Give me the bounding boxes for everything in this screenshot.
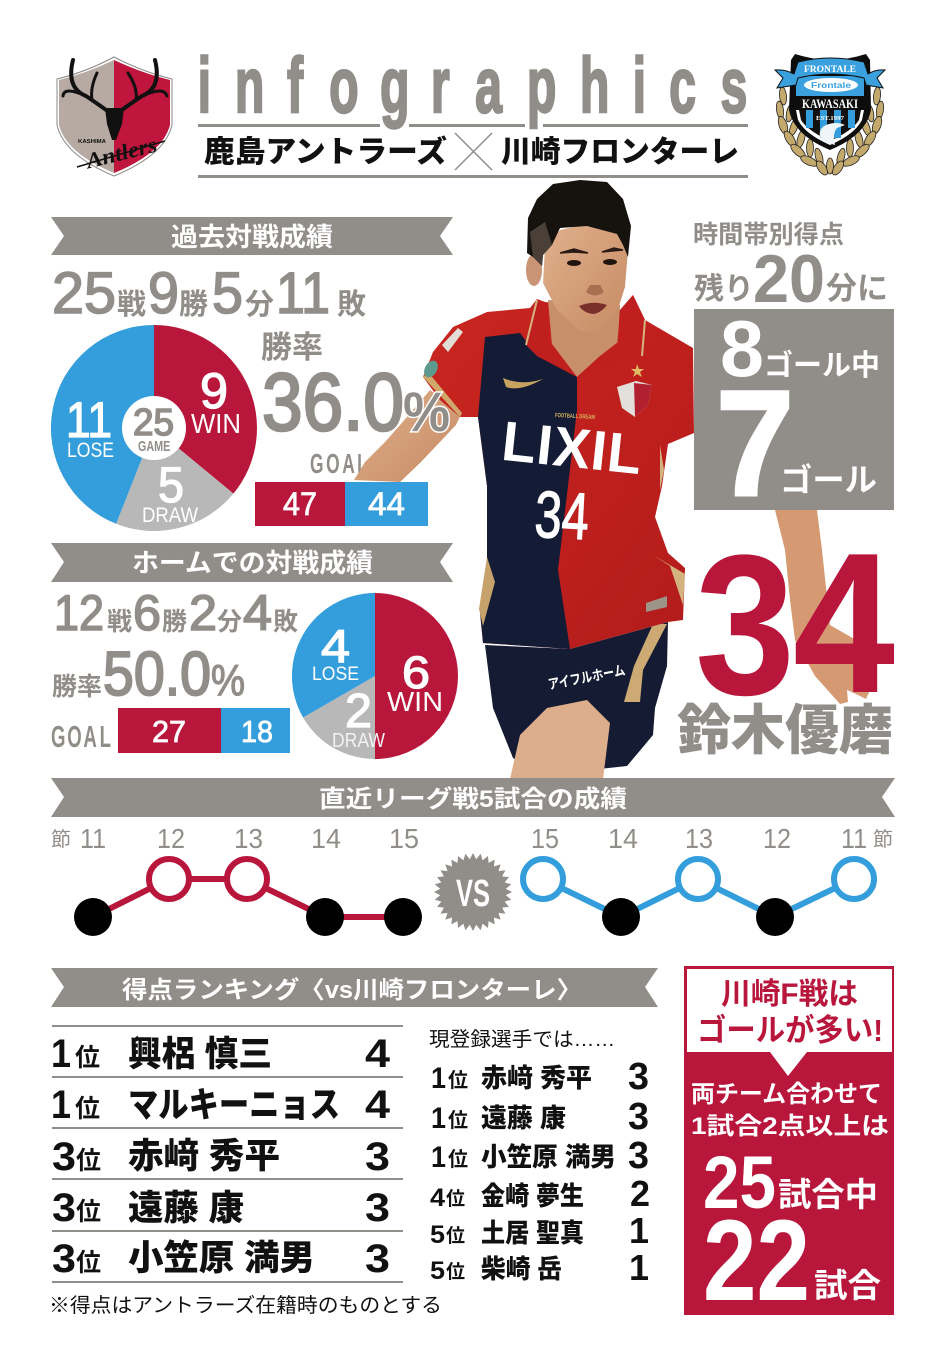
pie chart: overall record: 25: [133, 402, 174, 444]
pie chart: home record: [292, 593, 458, 759]
stat line: home record: 4: [243, 585, 272, 641]
table: all-time scorers: 遠藤 康: [128, 1189, 244, 1228]
stat line: home record: 2: [189, 585, 217, 641]
table: all-time scorers: 3: [52, 1186, 76, 1230]
callout panel: many goals against Kawasaki: 両チーム合わせて: [691, 1081, 882, 1108]
text: goal label: GOAL: [310, 448, 368, 479]
bar: goals at home: 18: [241, 714, 273, 749]
stat line: overall record: 11: [276, 261, 330, 326]
bar: goals overall: 44: [368, 486, 405, 522]
title: infographics: infographics: [198, 41, 747, 129]
table: current squad scorers: 金崎 夢生: [481, 1181, 584, 1211]
crest: Kashima Antlers: KASHIMA: [78, 139, 106, 145]
bar: goals overall: 47: [283, 486, 317, 522]
table: all-time scorers: 1: [51, 1083, 71, 1127]
stat line: overall record: 分: [245, 288, 274, 321]
callout panel: many goals against Kawasaki: 試合中: [778, 1176, 878, 1213]
panel: late goals: ゴール: [780, 462, 877, 498]
bar: goals at home: 27: [152, 714, 186, 749]
text: goals by time period: 分に: [826, 271, 888, 306]
text: goals by time period: 時間帯別得点: [693, 221, 844, 249]
crest: Kawasaki Frontale: FRONTALE: [804, 65, 856, 75]
table: current squad scorers: 3: [628, 1056, 649, 1098]
table: all-time scorers: 位: [76, 1147, 101, 1175]
table: all-time scorers: 3: [365, 1237, 390, 1281]
panel: late goals: 8: [720, 304, 764, 393]
bar: goals overall: [255, 482, 428, 526]
stat line: home record: 12: [54, 585, 104, 641]
round labels: Kawasaki: 節: [873, 828, 893, 851]
pie chart: home record: 6: [402, 647, 430, 698]
stat line: home record: 戦: [107, 608, 132, 636]
table: current squad scorers: 1: [431, 1102, 446, 1135]
stat line: overall record: 9: [148, 261, 179, 326]
stat line: overall record: 5: [212, 261, 243, 326]
panel: late goals: 7: [716, 359, 794, 527]
round labels: Kawasaki: 15: [531, 823, 559, 854]
table: current squad scorers: 1: [431, 1062, 446, 1095]
player photo illustration: 34: [533, 477, 591, 553]
heading: match-up: 鹿島アントラーズ: [204, 135, 447, 169]
stat: home win rate 50.0%: [52, 640, 245, 709]
crest: Kashima Antlers: Antlers: [81, 132, 159, 174]
stat line: overall record: 戦: [117, 288, 146, 321]
table: current squad scorers: 小笠原 満男: [481, 1142, 616, 1172]
table: all-time scorers: 位: [76, 1198, 101, 1226]
ribbon heading: past results: [51, 217, 453, 255]
callout panel: many goals against Kawasaki: 22: [703, 1197, 810, 1325]
table: all-time scorers: マルキーニョス: [128, 1086, 340, 1125]
table: all-time scorers: 1: [51, 1032, 71, 1076]
results chain: Kawasaki: [523, 859, 874, 936]
round labels: Kawasaki: 14: [608, 823, 638, 854]
player photo illustration: アイフルホーム: [547, 662, 626, 692]
player photo illustration: LIXIL: [499, 409, 645, 486]
crest: Kawasaki Frontale: EST.1997: [816, 115, 845, 122]
round labels: Kashima: 12: [157, 823, 185, 854]
table: all-time scorers: 位: [75, 1044, 100, 1072]
round labels: Kashima: [51, 823, 419, 854]
pie chart: home record: DRAW: [332, 730, 385, 752]
title: infographics: [198, 41, 748, 178]
panel: late goals: [694, 304, 894, 527]
table: current squad scorers: 赤﨑 秀平: [481, 1063, 592, 1093]
round labels: Kawasaki: 13: [685, 823, 713, 854]
table: current squad scorers: 位: [446, 1261, 465, 1283]
round labels: Kawasaki: 12: [763, 823, 791, 854]
pie chart: overall record: 9: [200, 363, 228, 419]
player name: 鈴木優磨: [677, 701, 893, 761]
table: current squad scorers: 2: [630, 1173, 650, 1214]
player number 34: [695, 512, 895, 737]
icon: VS burst: [434, 853, 512, 931]
table: current squad scorers: 位: [448, 1109, 468, 1132]
table: current squad scorers: [429, 1028, 650, 1288]
stat: home win rate 50.0%: 50.0: [103, 640, 211, 709]
pie chart: overall record: DRAW: [142, 504, 198, 527]
stat line: overall record: [52, 261, 366, 326]
callout panel: many goals against Kawasaki: ゴールが多い!: [697, 1013, 883, 1048]
round labels: Kashima: 11: [80, 823, 106, 854]
callout panel: many goals against Kawasaki: 25: [703, 1141, 776, 1224]
pie chart: home record: 2: [345, 685, 372, 738]
ribbon heading: past results: 過去対戦成績: [171, 222, 333, 252]
ribbon heading: last five league matches: 直近リーグ戦5試合の成績: [319, 785, 627, 813]
round labels: Kashima: 13: [234, 823, 263, 854]
table: current squad scorers: 遠藤 康: [481, 1103, 566, 1133]
table: current squad scorers: 5: [430, 1257, 445, 1285]
pie chart: home record: 4: [321, 620, 350, 672]
ribbon heading: home results: ホームでの対戦成績: [132, 548, 373, 578]
table: current squad scorers: 3: [628, 1096, 649, 1138]
player number 34: 4: [793, 512, 895, 735]
table: all-time scorers: 赤﨑 秀平: [128, 1137, 280, 1176]
pie chart: overall record: 5: [158, 457, 184, 513]
table: current squad scorers: 1: [629, 1210, 649, 1251]
table: current squad scorers: 位: [448, 1148, 468, 1171]
round labels: Kawasaki: 11: [841, 823, 867, 854]
stat: win rate 36.0%: %: [403, 380, 450, 443]
table: all-time scorers: 4: [365, 1032, 391, 1076]
pie chart: home record: WIN: [387, 686, 443, 717]
stat line: overall record: 敗: [337, 288, 366, 321]
player photo illustration: [354, 180, 870, 779]
table: all-time scorers: 3: [365, 1186, 390, 1230]
stat: home win rate 50.0%: 勝率: [52, 673, 102, 701]
crest: Kashima Antlers: [57, 57, 172, 176]
ribbon heading: last five league matches: [51, 778, 895, 817]
callout panel: many goals against Kawasaki: 1試合2点以上は: [691, 1113, 889, 1140]
pie chart: overall record: GAME: [138, 437, 171, 454]
table: all-time scorers: 小笠原 満男: [128, 1239, 315, 1278]
table: current squad scorers: 5: [430, 1221, 445, 1249]
pie chart: overall record: WIN: [191, 408, 241, 439]
table: current squad scorers: 現登録選手では……: [429, 1028, 615, 1051]
bar: goals at home: GOAL: [51, 720, 111, 754]
icon: VS burst: VS: [456, 873, 490, 915]
stat line: overall record: 勝: [179, 288, 208, 321]
callout panel: many goals against Kawasaki: [684, 966, 894, 1325]
table: all-time scorers: [51, 1025, 403, 1283]
table: current squad scorers: 1: [431, 1141, 446, 1174]
ribbon heading: scoring ranking: 得点ランキング〈vs川崎フロンターレ〉: [122, 976, 582, 1004]
stat line: home record: 6: [133, 585, 161, 641]
round labels: Kashima: 節: [51, 828, 71, 851]
table: all-time scorers: 位: [76, 1249, 101, 1277]
callout panel: many goals against Kawasaki: 試合: [814, 1267, 881, 1304]
table: all-time scorers: 3: [365, 1135, 390, 1179]
text: goals by time period: [693, 221, 888, 317]
callout panel: many goals against Kawasaki: 川崎F戦は: [721, 978, 858, 1011]
player photo illustration: FOOTBALL DREAM: [555, 413, 595, 421]
pie chart: overall record: [51, 325, 257, 531]
stat line: home record: 勝: [162, 608, 187, 636]
table: all-time scorers: 興梠 慎三: [128, 1035, 272, 1074]
round labels: Kawasaki: [531, 823, 893, 854]
heading: match-up: [204, 133, 739, 170]
table: current squad scorers: 位: [448, 1069, 468, 1092]
table: all-time scorers: 位: [75, 1095, 100, 1123]
stat: win rate 36.0%: 36.0: [262, 357, 404, 448]
table: current squad scorers: 位: [446, 1188, 465, 1210]
text: goals by time period: 残り: [694, 273, 754, 306]
stat line: overall record: 25: [52, 261, 116, 326]
table: all-time scorers: 4: [365, 1083, 391, 1127]
table: current squad scorers: 1: [629, 1247, 649, 1288]
table: current squad scorers: 3: [628, 1135, 649, 1177]
table: current squad scorers: 土居 聖真: [481, 1218, 584, 1248]
panel: late goals: ゴール中: [764, 348, 880, 382]
stat line: home record: 分: [217, 608, 242, 636]
crest: Kawasaki Frontale: KAWASAKI: [802, 96, 858, 111]
table: all-time scorers: 3: [52, 1237, 76, 1281]
pie chart: home record: LOSE: [312, 664, 359, 685]
round labels: Kashima: 14: [311, 823, 341, 854]
table: current squad scorers: 位: [446, 1225, 465, 1247]
heading: match-up: 川崎フロンターレ: [501, 136, 739, 169]
pie chart: overall record: LOSE: [67, 439, 114, 462]
stat line: home record: 敗: [273, 608, 298, 636]
results chain: Kashima: [74, 859, 422, 936]
label: win rate: 勝率: [261, 330, 323, 365]
ribbon heading: home results: [51, 543, 453, 582]
crest: Kawasaki Frontale: Frontale: [811, 81, 852, 90]
player number 34: 3: [695, 514, 795, 737]
table: all-time scorers: 3: [52, 1135, 76, 1179]
text: goals by time period: 20: [753, 241, 825, 317]
ribbon heading: scoring ranking: [51, 968, 658, 1007]
crest: Kawasaki Frontale: [775, 54, 885, 177]
stat: home win rate 50.0%: %: [211, 656, 245, 705]
table: current squad scorers: 4: [430, 1184, 445, 1212]
table: current squad scorers: 柴崎 岳: [481, 1254, 562, 1284]
round labels: Kashima: 15: [389, 823, 419, 854]
pie chart: overall record: 11: [66, 392, 112, 448]
footnote: ※得点はアントラーズ在籍時のものとする: [49, 1294, 442, 1317]
bar: goals at home: [51, 708, 290, 754]
stat line: home record: [54, 585, 298, 641]
